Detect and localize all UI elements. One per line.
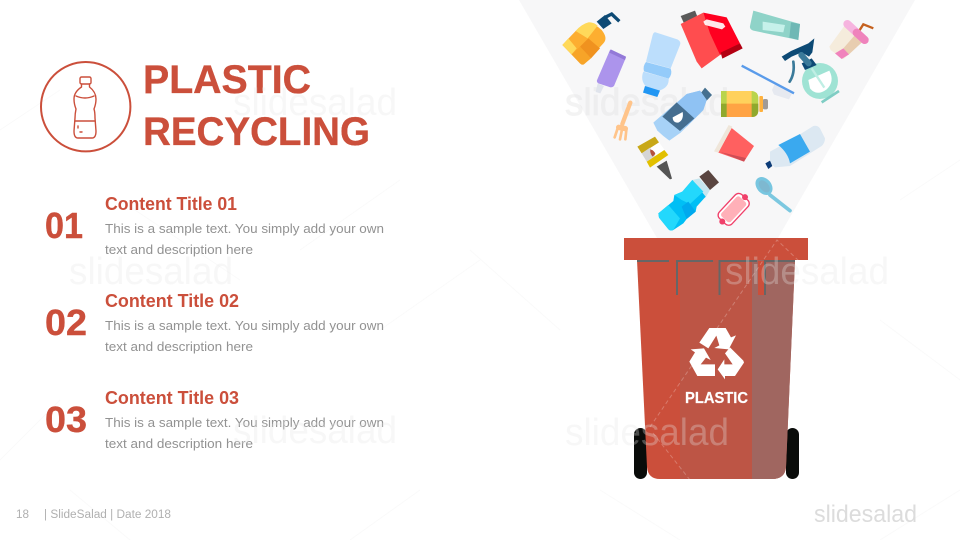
footer: 18 xyxy=(16,509,29,521)
number 03: 03 xyxy=(45,399,87,440)
bin label: PLASTIC xyxy=(685,390,748,407)
icon: labelled water bottle xyxy=(653,88,712,141)
wheelie bin xyxy=(624,238,808,479)
description 03: This is a sample text. You simply add your own xyxy=(105,415,384,430)
footer logo: slidesalad xyxy=(814,501,917,528)
bin hinges xyxy=(637,261,795,295)
icon: spoon xyxy=(752,174,790,211)
icon: light blue jug xyxy=(642,32,680,97)
description 02: This is a sample text. You simply add your own xyxy=(105,318,384,333)
watermarks: slidesalad xyxy=(233,410,397,452)
icon: glue bottle xyxy=(637,137,672,179)
funnel beam xyxy=(519,0,915,238)
footer: | SlideSalad | Date 2018 xyxy=(44,509,171,521)
title xyxy=(143,58,370,154)
watermarks: slidesalad xyxy=(725,251,889,293)
watermarks: slidesalad xyxy=(233,82,397,124)
bin wheels xyxy=(634,428,799,479)
watermarks xyxy=(69,82,889,454)
watermarks: slidesalad xyxy=(69,251,233,293)
number 02: 02 xyxy=(45,302,87,343)
icon: recycling symbol xyxy=(689,328,744,379)
content title 02: Content Title 02 xyxy=(105,291,239,311)
icon: teal tube xyxy=(750,11,800,40)
icon: soap dispenser xyxy=(562,14,619,65)
icon: fork xyxy=(615,103,630,139)
description 02 xyxy=(105,318,384,354)
content title 01: Content Title 01 xyxy=(105,194,237,214)
icon: milkshake cup xyxy=(829,24,873,59)
item 01 xyxy=(45,194,384,257)
item 03 xyxy=(45,388,384,451)
plastic items falling into bin xyxy=(562,11,873,231)
description 03 xyxy=(105,415,384,451)
description 01 xyxy=(105,221,384,257)
icon: red jug xyxy=(681,11,743,68)
bin body xyxy=(637,260,795,479)
icon: bottle in circle xyxy=(41,62,130,151)
item 02 xyxy=(45,291,384,354)
icon: brush xyxy=(742,66,794,99)
watermarks: slidesalad xyxy=(565,412,729,454)
icon: purple tube xyxy=(596,49,626,93)
icon: spray bottle xyxy=(782,38,839,102)
icon: red cup xyxy=(714,125,754,162)
title: RECYCLING xyxy=(143,110,370,154)
description 03: text and description here xyxy=(105,436,253,451)
watermark behind items: slidesalad xyxy=(565,82,729,124)
content title 03: Content Title 03 xyxy=(105,388,239,408)
description 01: This is a sample text. You simply add your own xyxy=(105,221,384,236)
description 01: text and description here xyxy=(105,242,253,257)
icon: pink soap box xyxy=(714,189,753,230)
icon: yellow tube xyxy=(721,91,768,117)
title: PLASTIC xyxy=(143,58,311,102)
number 01: 01 xyxy=(45,205,83,246)
icon: cyan bottle xyxy=(658,170,719,231)
icon: blue bottle xyxy=(765,126,825,169)
bin lid xyxy=(624,238,808,260)
description 02: text and description here xyxy=(105,339,253,354)
